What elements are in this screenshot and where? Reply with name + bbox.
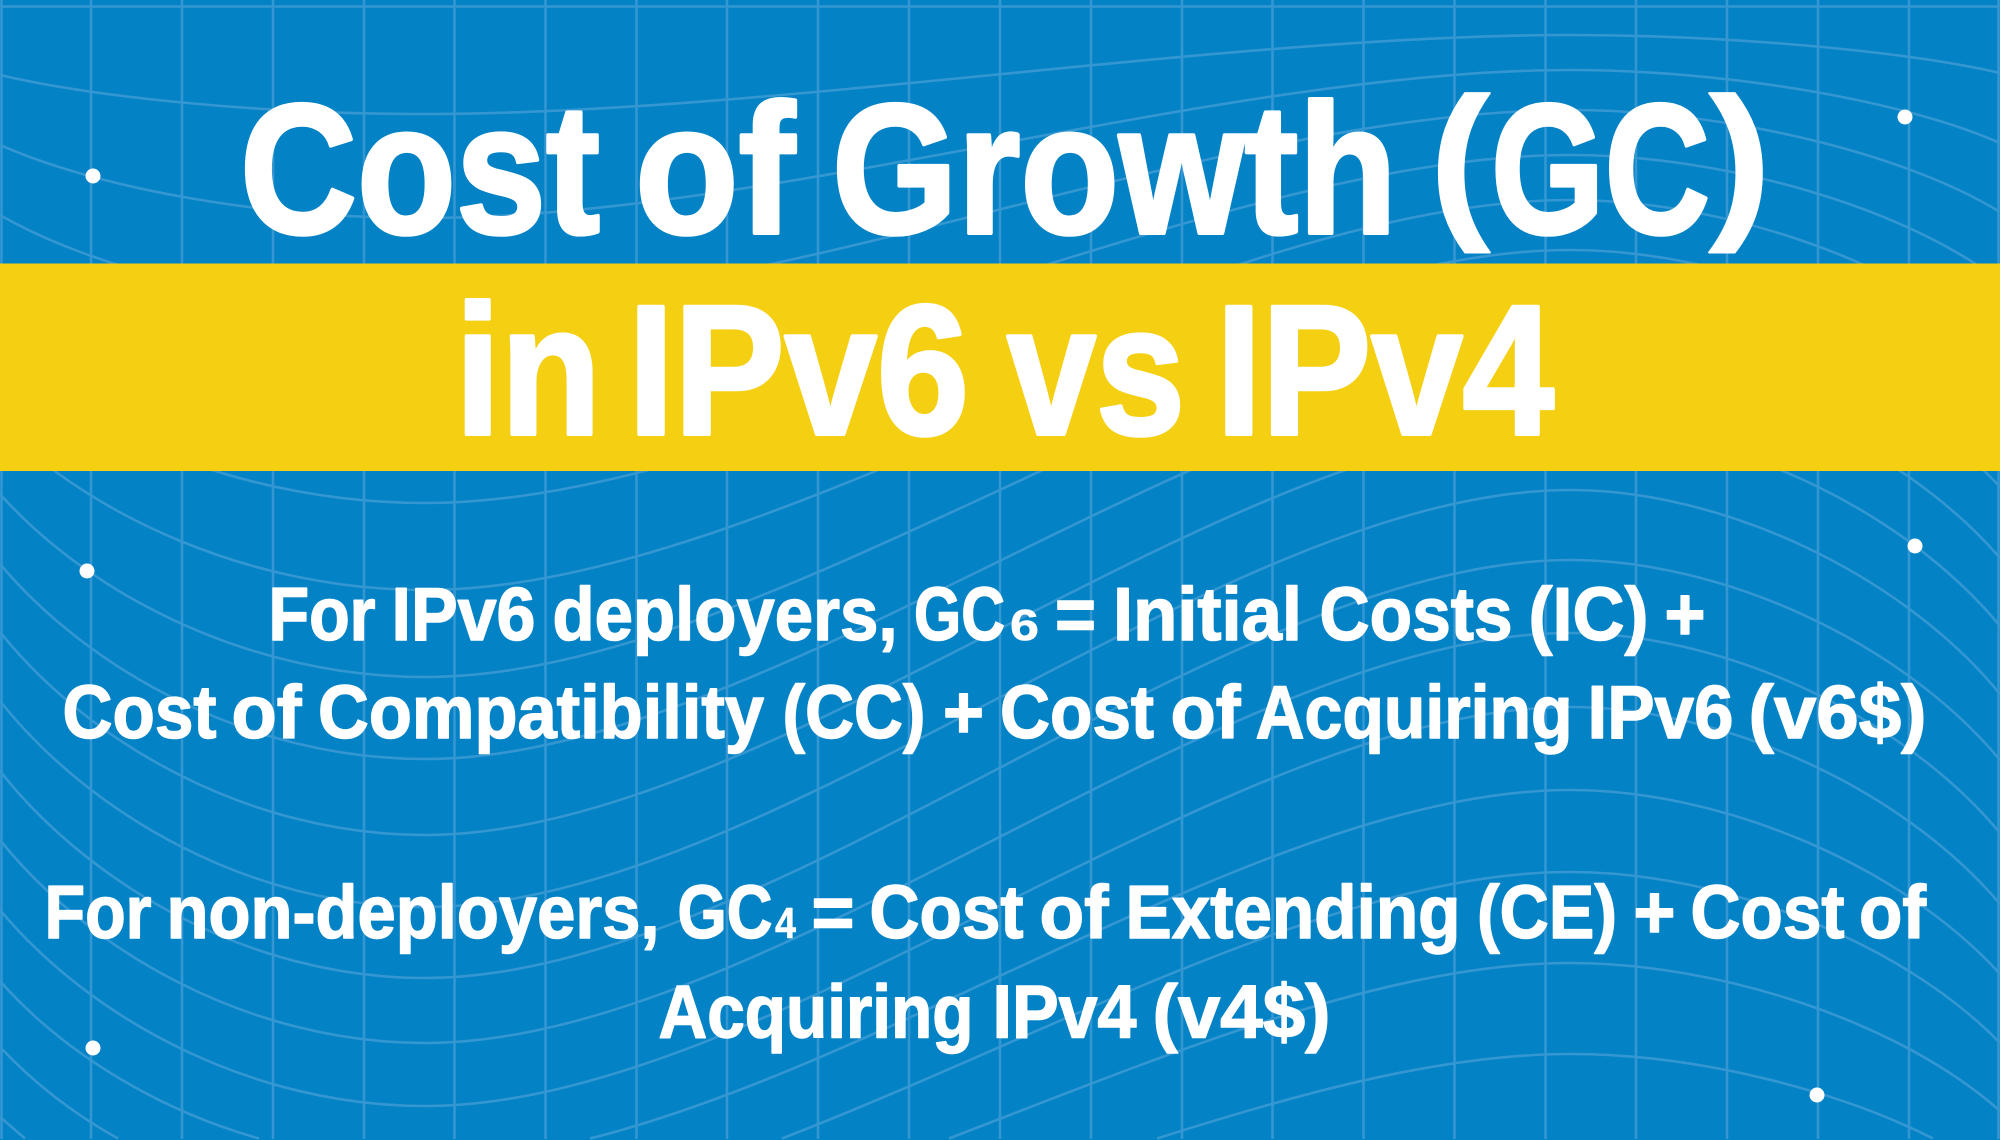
title line 1: Growth <box>832 67 1397 273</box>
formula line 3: GC <box>678 870 772 954</box>
title line 2: IPv6 <box>628 268 969 474</box>
formula line 2: Cost <box>1000 670 1154 754</box>
formula line 3: + <box>1634 870 1676 954</box>
formula line 2: (v6$) <box>1748 670 1926 754</box>
title line 2: IPv4 <box>1216 268 1554 474</box>
title line 2: in <box>455 268 601 474</box>
yellow band <box>0 264 2000 471</box>
formula line 1: Costs <box>1320 572 1512 656</box>
formula line 3: Cost <box>870 870 1024 954</box>
formula line 2: of <box>232 670 303 754</box>
formula line 4: Acquiring <box>658 970 974 1054</box>
formula line 2: + <box>943 670 984 754</box>
title line 2: vs <box>1007 268 1185 474</box>
formula line 1: = <box>1055 572 1096 656</box>
formula line 4: IPv4 <box>992 970 1137 1054</box>
formula line 1: GC <box>914 572 1005 656</box>
formula line 2: Cost <box>62 670 217 754</box>
formula line 3: of <box>1859 870 1927 954</box>
formula line 3: Cost <box>1690 870 1845 954</box>
title line 1: Cost <box>240 67 600 273</box>
formula line 2: IPv6 <box>1588 670 1734 754</box>
formula line 3: (CE) <box>1477 870 1617 954</box>
title line 1: ) <box>1709 63 1771 254</box>
title line 1: ( <box>1430 63 1490 254</box>
formula line 1: 6 <box>1010 601 1039 650</box>
formula line 3: non-deployers, <box>166 870 660 954</box>
formula line 2: of <box>1170 670 1242 754</box>
formula line 1: + <box>1664 572 1706 656</box>
formula line 2: Acquiring <box>1256 670 1572 754</box>
formula line 3: 4 <box>775 899 796 948</box>
formula line 1: IPv6 <box>392 572 536 656</box>
IPv6 deployers formula <box>62 572 1926 754</box>
formula line 1: (IC) <box>1528 572 1648 656</box>
formula line 1: deployers, <box>552 572 898 656</box>
formula line 3: For <box>44 870 152 954</box>
formula line 3: Extending <box>1126 870 1460 954</box>
formula line 3: = <box>812 870 854 954</box>
formula line 1: Initial <box>1113 572 1302 656</box>
formula line 4: (v4$) <box>1152 970 1330 1054</box>
title line 1: GC <box>1491 67 1710 273</box>
formula line 3: of <box>1040 870 1109 954</box>
formula line 2: (CC) <box>782 670 926 754</box>
non-deployers formula <box>44 870 1927 1054</box>
formula line 1: For <box>268 572 376 656</box>
formula line 2: Compatibility <box>318 670 764 754</box>
title line 1: of <box>635 67 795 273</box>
